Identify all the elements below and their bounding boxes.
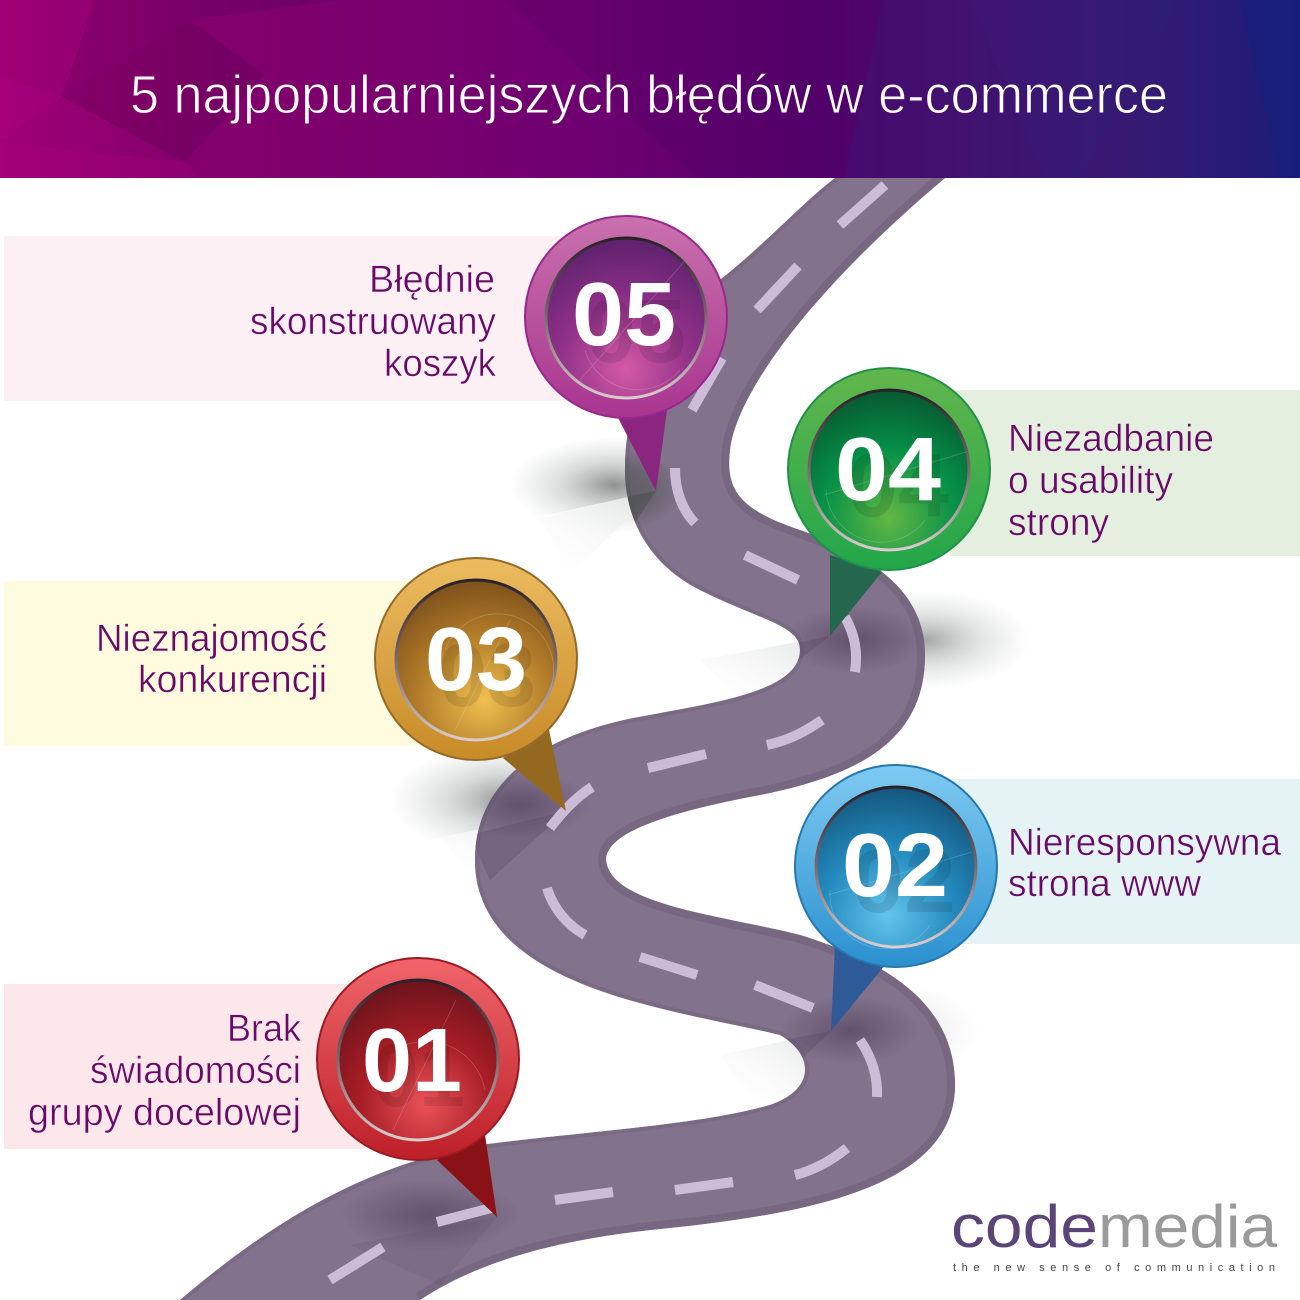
pin 01: 01 <box>362 1011 462 1111</box>
pin 04: 04 <box>847 436 949 536</box>
logo: codemedia: the new sense of communication <box>953 1262 1275 1274</box>
winding road <box>180 178 955 1300</box>
label band: 03 <box>4 581 424 746</box>
pin 03 <box>375 558 577 811</box>
pin 04: 04 <box>835 420 941 520</box>
logo: codemedia <box>951 1193 1278 1274</box>
text: Brak świadomości grupy docelowej: Brak <box>227 1008 302 1050</box>
text: Nieresponsywna strona www: strona www <box>1008 863 1202 905</box>
road centre dashes <box>330 185 885 1280</box>
text: Nieznajomość konkurencji: Nieznajomość <box>96 618 327 660</box>
text: Niezadbanie o usability strony <box>1008 418 1214 544</box>
pin 02: 02 <box>852 832 956 932</box>
pin 02: 02 <box>842 816 948 916</box>
header banner <box>0 0 1300 178</box>
text: Błędnie skonstruowany koszyk <box>250 259 497 385</box>
text: Niezadbanie o usability strony: strony <box>1008 502 1109 544</box>
pin 03: 03 <box>425 610 527 710</box>
pin 04 <box>788 368 990 636</box>
text: Brak świadomości grupy docelowej: grupy docelowej <box>28 1092 301 1134</box>
text: Niezadbanie o usability strony: o usability <box>1008 460 1173 502</box>
text: Brak świadomości grupy docelowej: świadomości <box>90 1050 301 1092</box>
label band: 04 <box>950 390 1300 556</box>
label band: 01 <box>4 984 364 1149</box>
label band: 05 <box>4 236 564 401</box>
text: Nieznajomość konkurencji <box>96 618 327 701</box>
text: Błędnie skonstruowany koszyk: Błędnie <box>369 259 495 301</box>
text: Nieznajomość konkurencji: konkurencji <box>138 659 327 701</box>
text: Niezadbanie o usability strony: Niezadbanie <box>1008 418 1214 460</box>
text: Brak świadomości grupy docelowej <box>28 1008 302 1134</box>
pin 01 <box>317 958 519 1217</box>
pin 05: 05 <box>572 265 676 365</box>
label band: 02 <box>950 779 1300 944</box>
pin 02 <box>795 765 997 1031</box>
pin 05: 05 <box>586 282 686 382</box>
text: Błędnie skonstruowany koszyk: koszyk <box>384 343 497 385</box>
pin 05 <box>525 216 727 491</box>
pin 03: 03 <box>438 626 536 726</box>
pin shadows on ground <box>390 437 1030 1105</box>
title: 5 najpopularniejszych błędów w e-commerce <box>130 65 1168 125</box>
pin 01: 01 <box>373 1026 465 1126</box>
logo: codemedia: code <box>951 1193 1098 1260</box>
logo: codemedia: media <box>1098 1193 1278 1260</box>
text: Błędnie skonstruowany koszyk: skonstruowany <box>250 301 496 343</box>
text: Nieresponsywna strona www <box>1008 822 1282 905</box>
text: Nieresponsywna strona www: Nieresponsywna <box>1008 822 1282 864</box>
